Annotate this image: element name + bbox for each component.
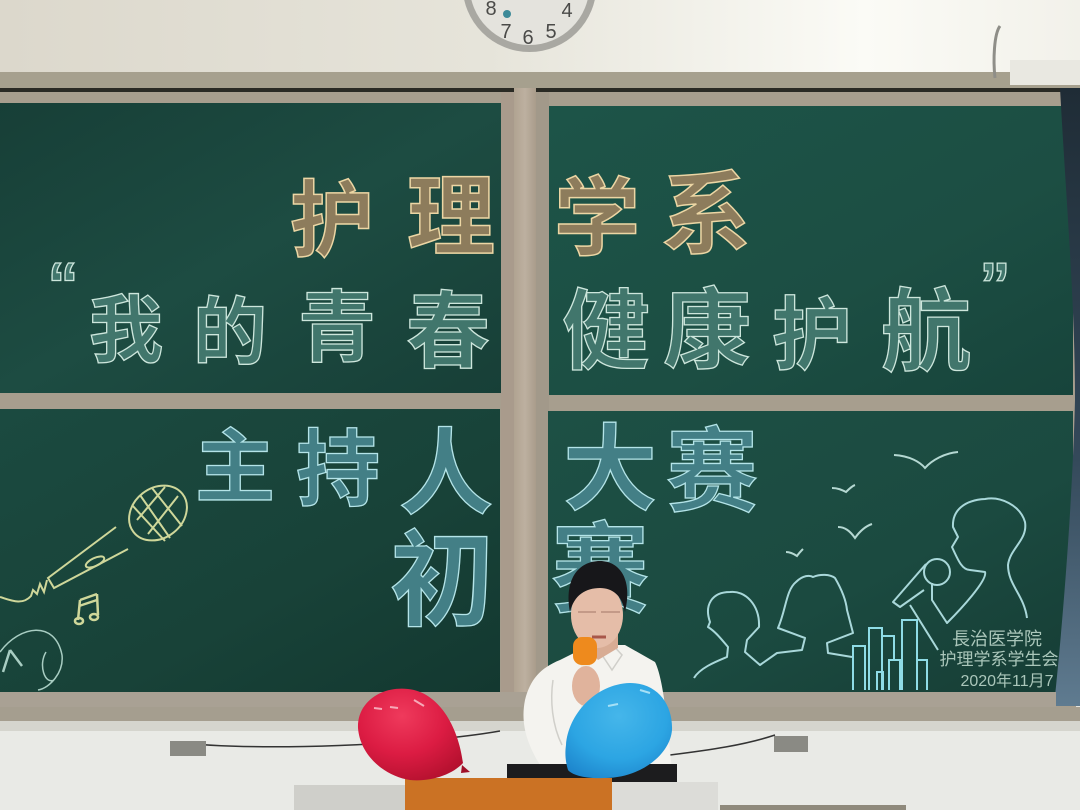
title line: department: 系 — [661, 166, 751, 266]
chalk city skyline — [853, 620, 927, 690]
speaker figure — [523, 561, 672, 770]
chalk silhouettes: audience — [694, 575, 853, 678]
icon: flying birds — [786, 452, 958, 556]
wall clock: 5 — [545, 21, 557, 43]
icon: music notes — [75, 594, 98, 624]
mouth — [592, 636, 606, 638]
wall clock: 6 — [522, 27, 534, 49]
left board lower panel — [0, 409, 500, 692]
title line: department: 理 — [407, 168, 495, 267]
title line: host contest — [195, 417, 758, 526]
title line: my youth, health escort: “ — [48, 251, 78, 320]
title line: host contest: 大 — [563, 417, 657, 522]
top rail — [0, 72, 1080, 88]
title line: preliminary round: 赛 — [551, 515, 649, 625]
white shirt — [523, 645, 672, 770]
title line: host contest: 主 — [195, 423, 275, 512]
lower wall — [0, 721, 1080, 810]
title line: my youth, health escort: ” — [980, 251, 1010, 320]
title line: host contest: 持 — [296, 423, 380, 517]
title line: department: 护 — [290, 174, 374, 268]
title line: my youth, health escort: 护 — [772, 291, 852, 380]
red balloon — [358, 689, 470, 780]
left board upper panel — [0, 103, 501, 393]
wall clock: 4 — [561, 0, 573, 22]
right board lower panel — [548, 411, 1073, 692]
signature text: 护理学系学生会 — [940, 650, 1058, 669]
wall above the board — [0, 0, 1080, 74]
icon: chalk microphone — [0, 474, 198, 602]
microphone handle — [581, 662, 590, 727]
icon: chalk swirl and notes — [0, 630, 62, 690]
chalk tray — [0, 692, 1080, 721]
wall clock: 7 — [500, 21, 512, 43]
signature text — [940, 629, 1058, 690]
right board upper panel — [549, 106, 1073, 395]
neck and face — [590, 630, 618, 660]
title line: preliminary round: 初 — [390, 524, 494, 640]
hand — [572, 666, 600, 706]
title line: my youth, health escort — [48, 251, 1010, 383]
glasses — [578, 611, 620, 613]
lectern — [294, 764, 906, 810]
title line: my youth, health escort: 康 — [663, 281, 751, 380]
title line: my youth, health escort: 航 — [881, 283, 971, 383]
signature text: 長治医学院 — [952, 629, 1042, 649]
orange microphone — [573, 637, 597, 665]
chalk silhouette: singer with microphone — [893, 498, 1027, 650]
wall cable and sockets — [0, 721, 1080, 756]
blue balloon — [565, 683, 672, 778]
title line: department — [290, 166, 751, 268]
wall bracket at top right — [994, 26, 1080, 85]
title line: my youth, health escort: 的 — [193, 291, 267, 374]
title line: my youth, health escort: 春 — [406, 285, 490, 379]
title line: preliminary round — [390, 515, 649, 640]
title line: host contest: 人 — [399, 421, 493, 526]
title line: my youth, health escort: 我 — [89, 289, 163, 372]
title line: my youth, health escort: 青 — [298, 284, 376, 372]
right curtain — [1054, 88, 1080, 706]
title line: department: 学 — [554, 171, 640, 267]
hair — [569, 561, 627, 612]
wall clock — [462, 0, 596, 52]
title line: my youth, health escort: 健 — [562, 282, 650, 381]
title line: host contest: 赛 — [666, 422, 758, 524]
signature text: 2020年11月7 — [960, 672, 1054, 690]
chalkboard frame — [0, 88, 1080, 712]
